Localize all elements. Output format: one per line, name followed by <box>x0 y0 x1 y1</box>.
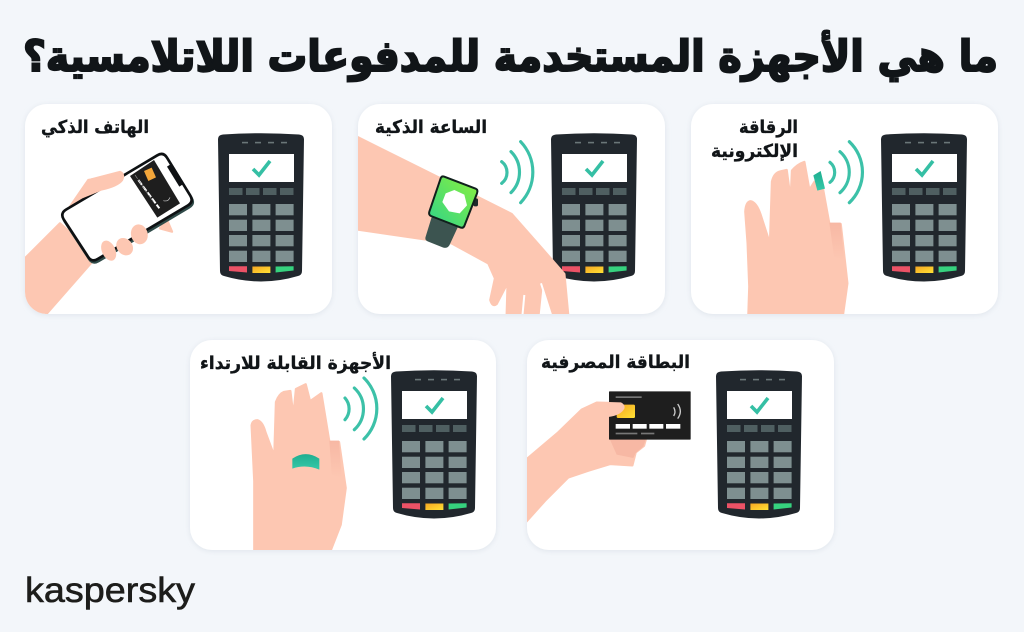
panel: wearables <box>190 340 496 555</box>
card background <box>527 340 834 550</box>
logo: kaspersky: kaspersky <box>25 571 196 610</box>
card background <box>190 340 496 550</box>
payment terminal <box>218 133 304 282</box>
hand with bank card <box>525 391 691 523</box>
phone <box>62 154 193 262</box>
arm with smartwatch <box>357 137 568 317</box>
label: smart chip: الرقاقة <box>739 117 798 138</box>
label: smart chip second line: الإلكترونية <box>711 141 798 162</box>
card background <box>691 104 998 314</box>
card background <box>358 104 665 314</box>
panel: smart chip <box>691 104 998 317</box>
label: wearables: الأجهزة القابلة للارتداء <box>200 352 391 374</box>
payment terminal <box>551 133 637 282</box>
hand with smartphone <box>20 154 193 317</box>
label: bank card: البطاقة المصرفية <box>541 352 690 373</box>
card background <box>25 104 332 314</box>
panel: bank card <box>525 340 834 550</box>
label: smartwatch: الساعة الذكية <box>375 117 487 138</box>
hand with chip implant <box>745 142 862 317</box>
label: smartphone: الهاتف الذكي <box>41 117 149 138</box>
hand with ring <box>252 378 377 555</box>
panel: smartwatch <box>357 104 665 317</box>
payment terminal <box>881 133 967 282</box>
payment terminal <box>716 370 802 518</box>
payment terminal <box>391 370 477 518</box>
panel: smartphone <box>20 104 332 317</box>
